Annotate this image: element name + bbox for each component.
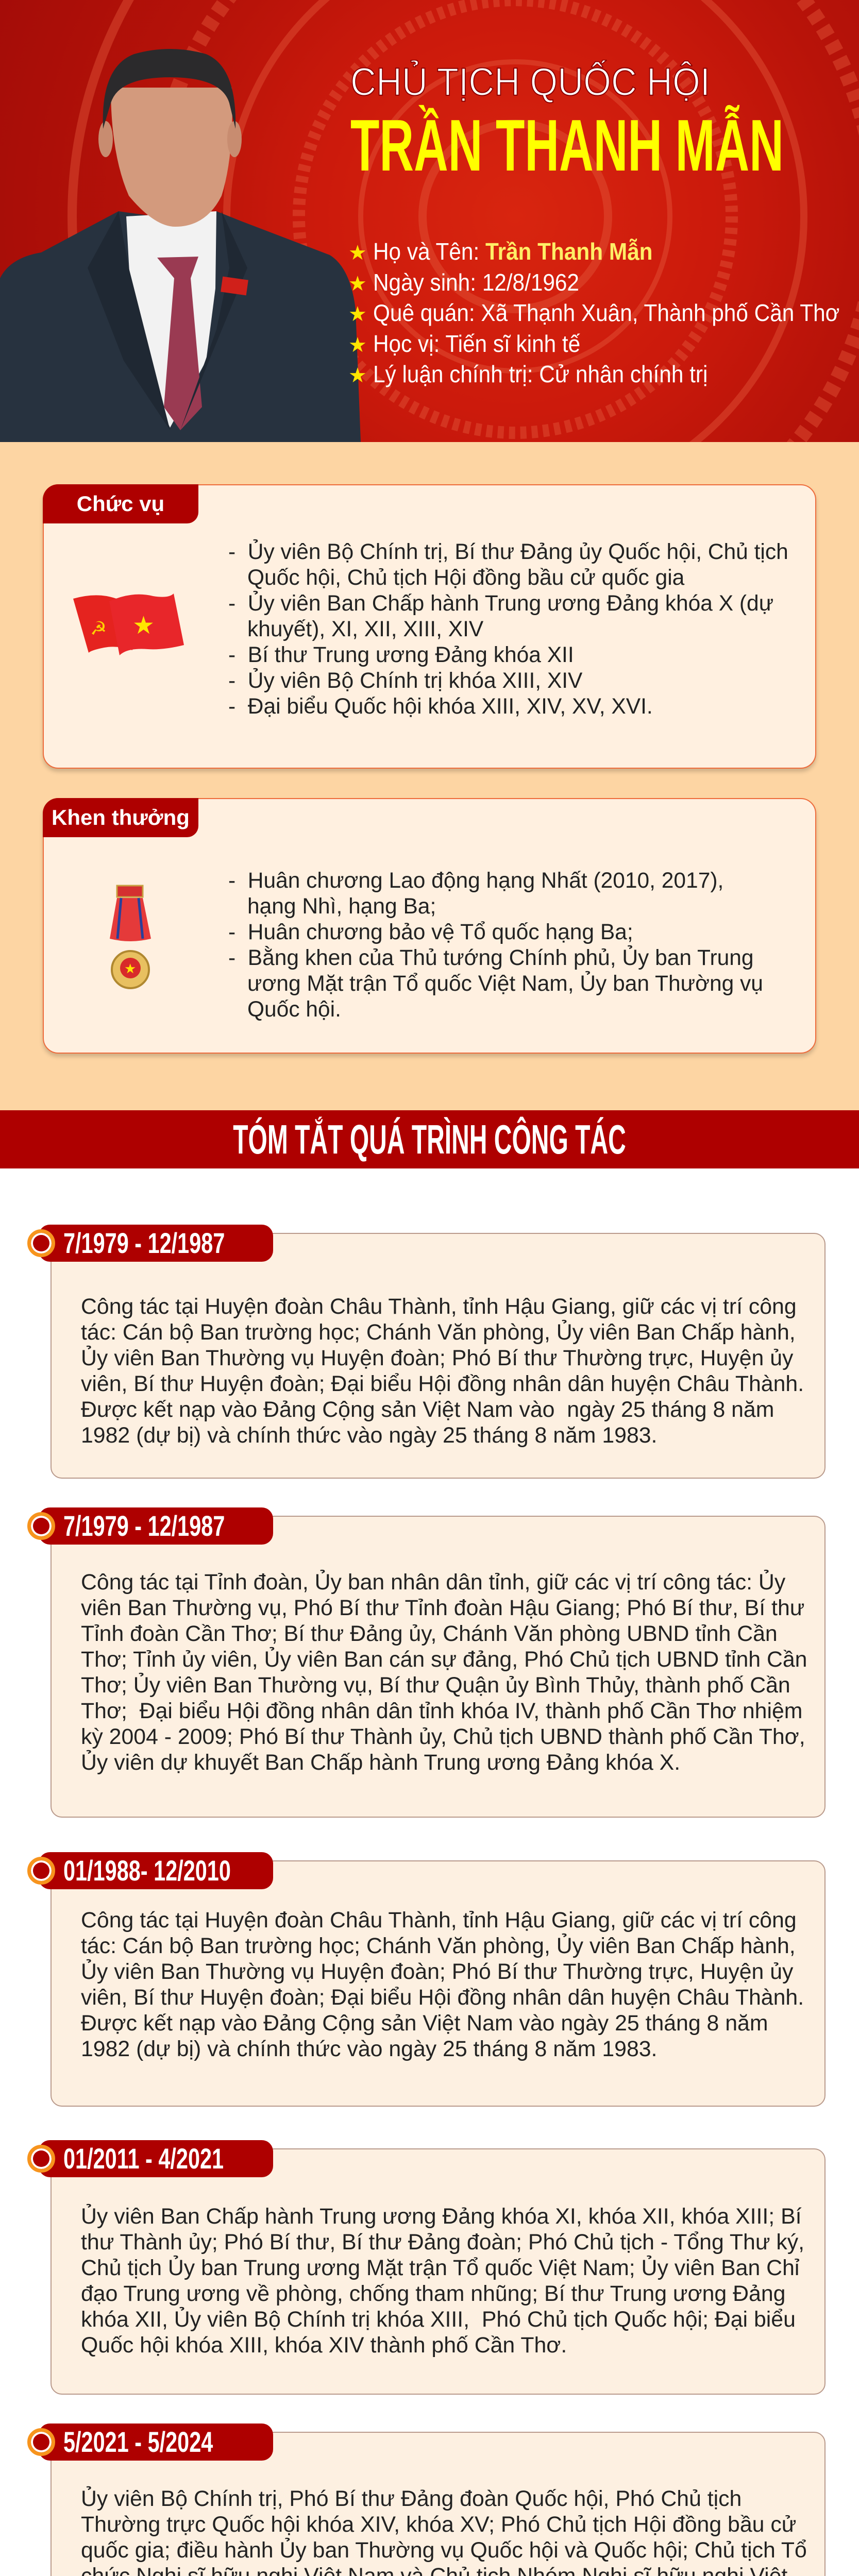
title: CHỦ TỊCH QUỐC HỘI: CHỦ TỊCH QUỐC HỘI	[350, 60, 710, 104]
personal info list: Học vị: Tiến sĩ kinh tế	[373, 330, 580, 357]
timeline item 1: Công tác tại Huyện đoàn Châu Thành, tỉnh Hậu Giang, giữ các vị trí công	[81, 1294, 797, 1319]
timeline item 1	[27, 1225, 826, 1479]
timeline item 2: Công tác tại Tỉnh đoàn, Ủy ban nhân dân tỉnh, giữ các vị trí công tác: Ủy	[81, 1570, 785, 1595]
timeline item 3: Được kết nạp vào Đảng Cộng sản Việt Nam vào ngày 25 tháng 8 năm	[81, 2011, 768, 2036]
timeline item 4: đạo Trung ương về phòng, chống tham nhũng; Bí thư Trung ương Đảng	[81, 2281, 785, 2306]
drum pattern background	[68, 0, 859, 442]
timeline item 3: Ủy viên Ban Thường vụ Huyện đoàn; Phó Bí thư Thường trực, Huyện ủy	[81, 1959, 793, 1984]
timeline item 5: Thường trực Quốc hội khóa XIV, khóa XV; Phó Chủ tịch Hội đồng bầu cử	[81, 2512, 796, 2537]
personal info list: Lý luận chính trị: Cử nhân chính trị	[373, 361, 708, 387]
personal info list: Họ và Tên: Trần Thanh Mẫn	[373, 238, 652, 265]
personal info list: ★	[348, 242, 367, 264]
list: awards: - Huân chương Lao động hạng Nhất (2010, 2017),	[228, 869, 723, 893]
timeline item 3: 1982 (dự bị) và chính thức vào ngày 25 tháng 8 năm 1983.	[81, 2037, 657, 2061]
timeline item 1: Ủy viên Ban Thường vụ Huyện đoàn; Phó Bí thư Thường trực, Huyện ủy	[81, 1346, 793, 1370]
timeline item 4	[27, 2140, 826, 2395]
icon: flags: ★	[132, 611, 155, 640]
list: positions: khuyết), XI, XII, XIII, XIV	[247, 617, 483, 641]
timeline item 4: khóa XII, Ủy viên Bộ Chính trị khóa XIII, Phó Chủ tịch Quốc hội; Đại biểu	[81, 2307, 796, 2332]
portrait photo	[0, 49, 361, 442]
tab: Khen thưởng	[43, 798, 198, 837]
timeline item 2: Thơ; Đại biểu Hội đồng nhân dân tỉnh khóa IV, thành phố Cần Thơ nhiệm	[81, 1699, 802, 1723]
timeline item 2: Thơ; Tỉnh ủy viên, Ủy viên Ban cán sự đảng, Phó Chủ tịch UBND tỉnh Cần	[81, 1647, 807, 1672]
header banner	[0, 0, 859, 442]
personal info list: ★	[348, 303, 367, 326]
timeline item 2: viên Ban Thường vụ, Phó Bí thư Tỉnh đoàn Hậu Giang; Phó Bí thư, Bí thư	[81, 1596, 804, 1620]
timeline item 1: Được kết nạp vào Đảng Cộng sản Việt Nam vào ngày 25 tháng 8 năm	[81, 1397, 774, 1422]
timeline item 1: viên, Bí thư Huyện đoàn; Đại biểu Hội đồng nhân dân huyện Châu Thành.	[81, 1371, 804, 1396]
timeline item 4: thư Thành ủy; Phó Bí thư, Bí thư Đảng đoàn; Phó Chủ tịch - Tổng Thư ký,	[81, 2230, 804, 2255]
icon: medal: ★	[124, 961, 136, 977]
list: awards: - Bằng khen của Thủ tướng Chính phủ, Ủy ban Trung	[228, 946, 754, 970]
timeline item 3: tác: Cán bộ Ban trường học; Chánh Văn phòng, Ủy viên Ban Chấp hành,	[81, 1934, 796, 1958]
timeline item 1: 1982 (dự bị) và chính thức vào ngày 25 tháng 8 năm 1983.	[81, 1423, 657, 1448]
list: awards: Quốc hội.	[247, 997, 341, 1022]
timeline item 3: Công tác tại Huyện đoàn Châu Thành, tỉnh Hậu Giang, giữ các vị trí công	[81, 1908, 797, 1933]
timeline item 4: 01/2011 - 4/2021	[63, 2142, 224, 2175]
personal info list: Ngày sinh: 12/8/1962	[373, 269, 579, 296]
icon: medal	[110, 885, 151, 989]
list: positions: - Bí thư Trung ương Đảng khóa XII	[228, 643, 574, 667]
beige section background	[0, 442, 859, 1110]
list: awards	[228, 869, 763, 1022]
timeline item 3	[27, 1852, 826, 2107]
personal info list: ★	[348, 272, 367, 295]
list: awards: - Huân chương bảo vệ Tổ quốc hạng Ba;	[228, 920, 633, 944]
timeline item 2: Ủy viên dự khuyết Ban Chấp hành Trung ương Đảng khóa X.	[81, 1750, 680, 1775]
timeline item 1: tác: Cán bộ Ban trường học; Chánh Văn phòng, Ủy viên Ban Chấp hành,	[81, 1320, 796, 1345]
timeline item 4: Quốc hội khóa XIII, khóa XIV thành phố Cần Thơ.	[81, 2333, 567, 2358]
personal info list: ★	[348, 364, 367, 387]
tab: Chức vụ: Chức vụ	[77, 492, 164, 516]
personal info list	[348, 238, 839, 387]
title: TRẦN THANH MẪN: TRẦN THANH MẪN	[350, 105, 784, 187]
list: positions: - Ủy viên Bộ Chính trị khóa XIII, XIV	[228, 669, 582, 693]
timeline item 2: 7/1979 - 12/1987	[63, 1510, 225, 1542]
list: awards: ương Mặt trận Tổ quốc Việt Nam, Ủy ban Thường vụ	[247, 972, 763, 996]
timeline item 5: quốc gia; điều hành Ủy ban Thường vụ Quốc hội và Quốc hội; Chủ tịch Tổ	[81, 2538, 807, 2563]
timeline item 2: Tỉnh đoàn Cần Thơ; Bí thư Đảng ủy, Chánh Văn phòng UBND tỉnh Cần	[81, 1621, 778, 1646]
list: positions	[228, 539, 788, 719]
heading: TÓM TẮT QUÁ TRÌNH CÔNG TÁC: TÓM TẮT QUÁ TRÌNH CÔNG TÁC	[233, 1116, 626, 1162]
timeline item 2	[27, 1507, 826, 1818]
timeline item 4: Chủ tịch Ủy ban Trung ương Mặt trận Tổ quốc Việt Nam; Ủy viên Ban Chỉ	[81, 2256, 799, 2280]
timeline item 2: Thơ; Ủy viên Ban Thường vụ, Bí thư Quận ủy Bình Thủy, thành phố Cần	[81, 1673, 790, 1698]
list: positions: - Đại biểu Quốc hội khóa XIII, XIV, XV, XVI.	[228, 694, 653, 719]
timeline item 1: 7/1979 - 12/1987	[63, 1227, 225, 1259]
list: positions: - Ủy viên Ban Chấp hành Trung ương Đảng khóa X (dự	[228, 591, 773, 616]
timeline item 3: viên, Bí thư Huyện đoàn; Đại biểu Hội đồng nhân dân huyện Châu Thành.	[81, 1985, 804, 2010]
personal info list: ★	[348, 334, 367, 357]
personal info list: Quê quán: Xã Thạnh Xuân, Thành phố Cần Thơ	[373, 299, 839, 326]
timeline item 5: Ủy viên Bộ Chính trị, Phó Bí thư Đảng đoàn Quốc hội, Phó Chủ tịch	[81, 2486, 742, 2511]
timeline item 5	[27, 2424, 826, 2576]
list: positions: Quốc hội, Chủ tịch Hội đồng bầu cử quốc gia	[247, 566, 684, 590]
timeline item 4: Ủy viên Ban Chấp hành Trung ương Đảng khóa XI, khóa XII, khóa XIII; Bí	[81, 2204, 802, 2229]
panel: Khen thưởng	[43, 798, 816, 1054]
heading: TÓM TẮT QUÁ TRÌNH CÔNG TÁC	[0, 1110, 859, 1168]
timeline item 3: 01/1988- 12/2010	[63, 1854, 231, 1887]
tab: Khen thưởng: Khen thưởng	[52, 805, 190, 829]
tab: Chức vụ	[43, 484, 198, 523]
list: positions: - Ủy viên Bộ Chính trị, Bí thư Đảng ủy Quốc hội, Chủ tịch	[228, 540, 788, 564]
panel: Chức vụ	[43, 484, 816, 769]
timeline item 2: kỳ 2004 - 2009; Phó Bí thư Thành ủy, Chủ tịch UBND thành phố Cần Thơ,	[81, 1724, 805, 1749]
icon: flags: ☭	[90, 618, 107, 639]
timeline item 5: 5/2021 - 5/2024	[63, 2426, 213, 2458]
list: awards: hạng Nhì, hạng Ba;	[247, 894, 436, 919]
icon: flags	[73, 594, 184, 655]
